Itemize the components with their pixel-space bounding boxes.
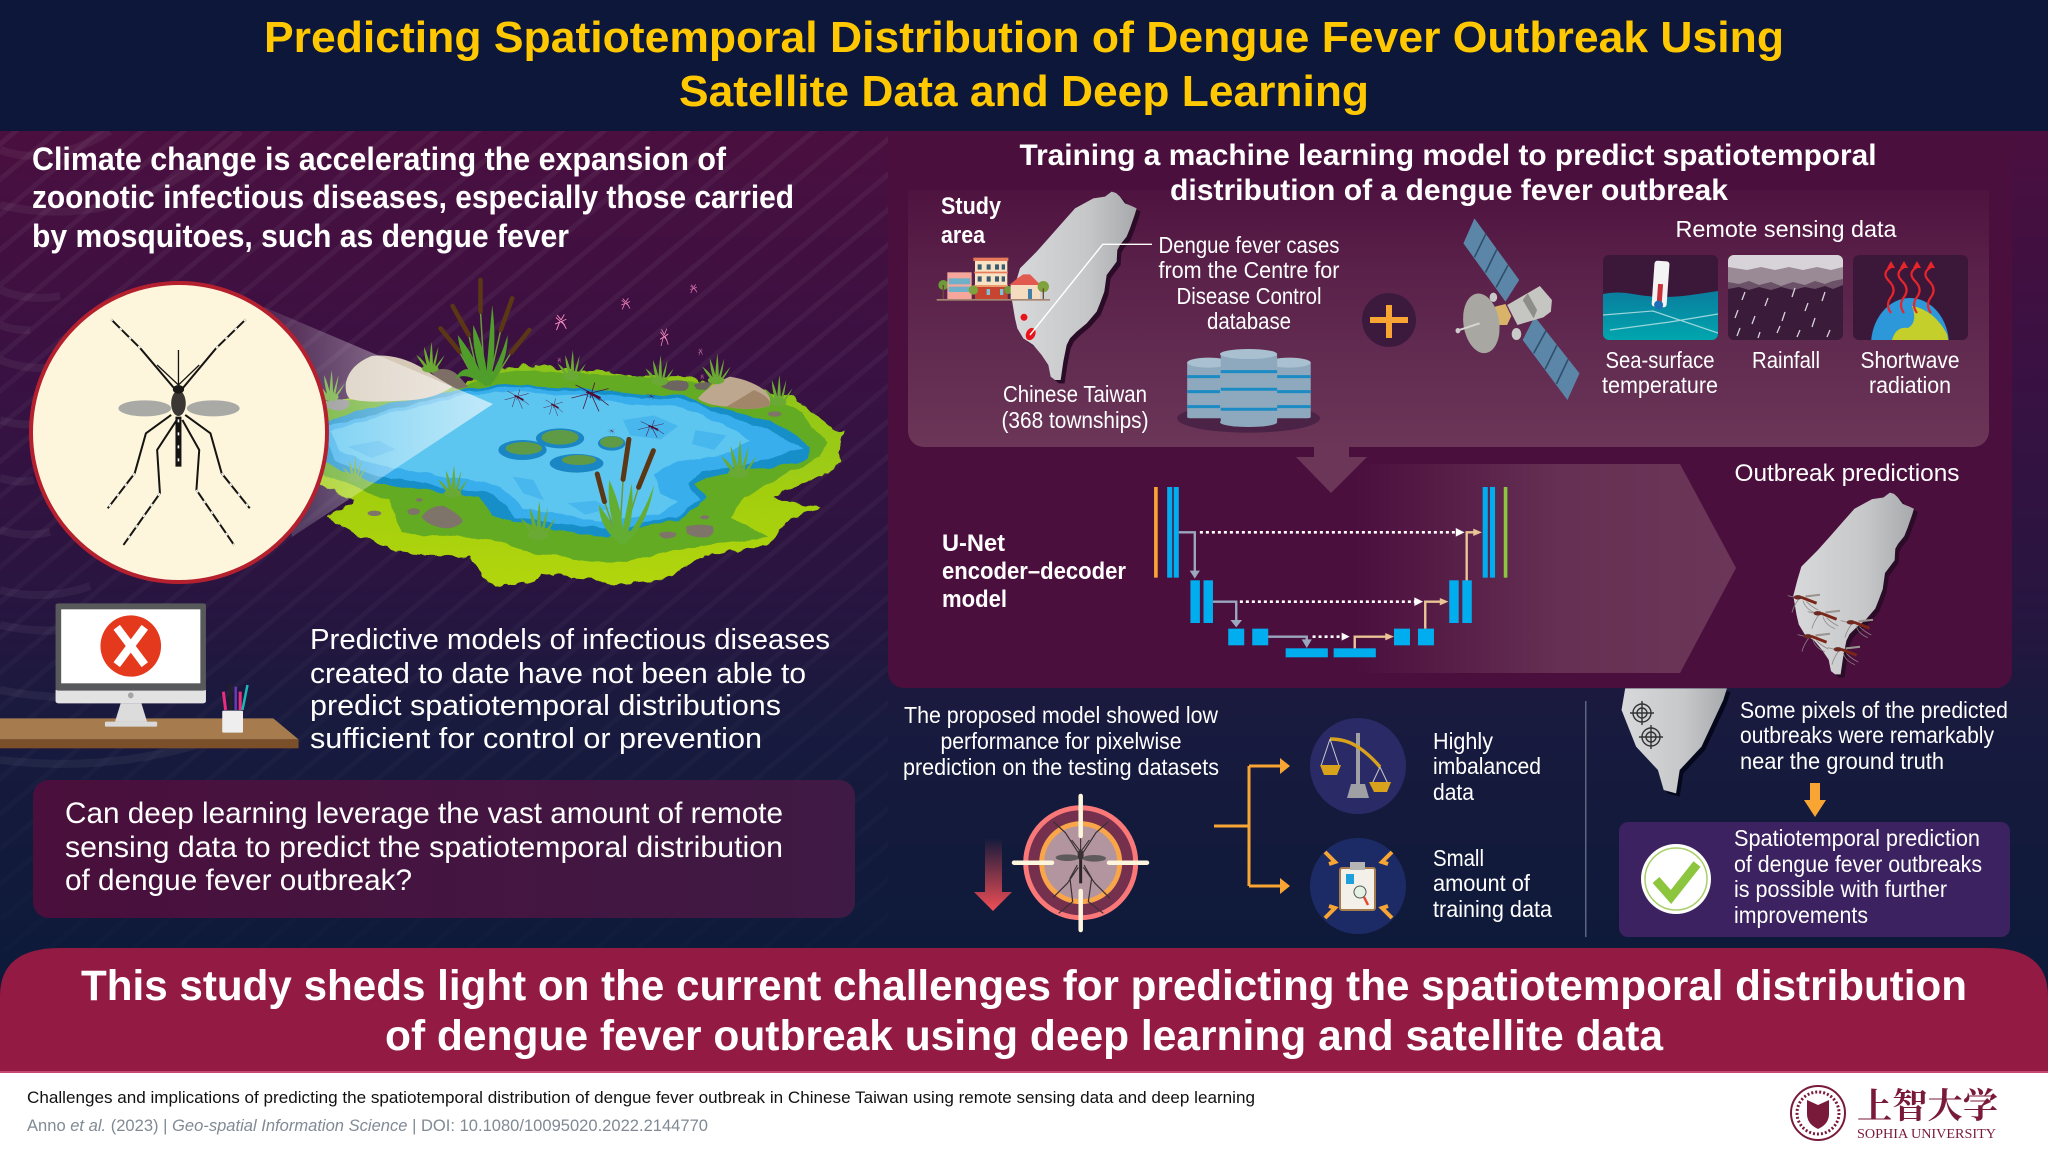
text: dengue fever cases: from the Centre for (1158, 257, 1340, 283)
panel: research question: of dengue fever outbreak? (65, 864, 412, 897)
panel: conclusion: of dengue fever outbreaks (1734, 851, 1982, 877)
icon: target markers (1630, 701, 1663, 749)
icon: database (1177, 349, 1320, 433)
tile: shortwave radiation (1853, 255, 1968, 340)
panel: conclusion: Spatiotemporal prediction (1734, 825, 1980, 851)
pond illustration (317, 280, 845, 587)
panel: conclusion: is possible with further (1734, 876, 1947, 902)
text: low performance (903, 702, 1219, 780)
heading: training a model: Training a machine learning model to predict spatiotemporal (1020, 139, 1876, 172)
mosquito swarm (505, 284, 704, 438)
heading: training a model (1020, 139, 1876, 207)
footer (0, 1071, 2048, 1152)
map: Taiwan study area (1012, 192, 1152, 383)
text: small training data: amount of (1433, 870, 1531, 896)
text: small training data (1433, 845, 1552, 922)
down arrow (1296, 447, 1367, 493)
grass tufts (317, 342, 793, 540)
tile labels: Sea-surface (1606, 347, 1714, 373)
text: small training data: Small (1433, 845, 1484, 871)
banner: conclusion statement (0, 948, 2048, 1072)
icon: buildings (937, 258, 1050, 301)
left headline: zoonotic infectious diseases, especially those carried (32, 179, 794, 215)
panel: conclusion (1619, 822, 2010, 937)
citation: Challenges and implications of predicting the spatiotemporal distribution of dengue fever outbreak in Chinese Taiwan using remote sensing data and deep learning (27, 1088, 1255, 1107)
icon: target mosquito (1014, 796, 1147, 930)
label: U-Net model: model (942, 586, 1007, 613)
text: highly imbalanced data (1433, 728, 1541, 805)
text: predictive models: created to date have not been able to (310, 658, 806, 690)
icon: clipboard data (1310, 838, 1406, 934)
text: some pixels: near the ground truth (1740, 748, 1944, 774)
icon: orange down arrow (1804, 783, 1826, 817)
plants: cattails (441, 280, 654, 544)
label: U-Net model: U-Net (942, 530, 1005, 557)
big arrow: model to predictions (1355, 464, 1736, 673)
left headline (32, 141, 794, 254)
icon: check mark (1641, 844, 1711, 914)
study area label: Study (941, 193, 1002, 220)
connector arrows (1214, 758, 1290, 894)
tile: sea-surface temperature (1603, 255, 1718, 340)
text: some pixels: Some pixels of the predicted (1740, 697, 2008, 723)
icon: balance scale (1310, 718, 1406, 814)
text: small training data: training data (1433, 896, 1552, 922)
logo: Sophia University (1791, 1086, 1998, 1142)
text: Chinese Taiwan: Chinese Taiwan (1003, 381, 1147, 407)
text: low performance: prediction on the testing datasets (903, 754, 1219, 780)
icon: mosquito (108, 319, 250, 545)
label: outbreak predictions: Outbreak predictions (1734, 460, 1960, 487)
title band: Satellite Data and Deep Learning (679, 67, 1369, 116)
label: U-Net model: encoder–decoder (942, 558, 1126, 585)
title band (0, 0, 2048, 131)
text: low performance: performance for pixelwise (940, 728, 1182, 754)
logo: Sophia University: 上智大学 (1857, 1087, 1998, 1126)
icon: computer with error (0, 603, 299, 748)
title band: Predicting Spatiotemporal Distribution of Dengue Fever Outbreak Using (264, 13, 1784, 62)
rocks (327, 356, 781, 539)
text: dengue fever cases (1158, 232, 1340, 334)
citation: Anno et al. (2023) | Geo-spatial Information Science | DOI: 10.1080/10095020.2022.2144770 (27, 1116, 708, 1135)
map: outbreak predictions (1793, 493, 1918, 678)
text: dengue fever cases: Dengue fever cases (1158, 232, 1340, 258)
icon: predicted mosquitoes (1788, 595, 1873, 665)
panel: conclusion: improvements (1734, 902, 1868, 928)
lily pads (498, 428, 625, 473)
text: Chinese Taiwan: (368 townships) (1002, 407, 1148, 433)
map: southern Taiwan detail (1622, 688, 1731, 797)
left headline: by mosquitoes, such as dengue fever (32, 218, 569, 254)
text: some pixels (1740, 697, 2008, 774)
text: highly imbalanced data: imbalanced (1433, 753, 1541, 779)
left headline: Climate change is accelerating the expansion of (32, 141, 726, 177)
text: predictive models: predict spatiotemporal distributions (310, 690, 781, 722)
text: dengue fever cases: Disease Control (1176, 283, 1322, 309)
label: remote sensing data: Remote sensing data (1676, 216, 1897, 242)
label: U-Net model (942, 530, 1126, 613)
text: predictive models: Predictive models of infectious diseases (310, 624, 830, 656)
text: low performance: The proposed model showed low (904, 702, 1218, 728)
icon: satellite (1455, 218, 1579, 400)
text: predictive models (310, 624, 830, 755)
tile labels: Shortwave (1860, 347, 1960, 373)
inner panel: input data (908, 190, 1989, 447)
study area label (941, 193, 1002, 249)
panel: research question: Can deep learning leverage the vast amount of remote (65, 797, 783, 830)
text: Chinese Taiwan (1002, 381, 1148, 433)
banner: conclusion statement: of dengue fever outbreak using deep learning and satellite data (385, 1012, 1664, 1060)
panel: research question: sensing data to predict the spatiotemporal distribution (65, 831, 783, 864)
text: highly imbalanced data: Highly (1433, 728, 1493, 754)
icon: plus (1362, 293, 1416, 347)
pond water (320, 385, 811, 538)
text: predictive models: sufficient for control or prevention (310, 723, 762, 755)
logo: Sophia University: SOPHIA UNIVERSITY (1857, 1127, 1996, 1142)
magnifier beam (264, 307, 493, 537)
text: some pixels: outbreaks were remarkably (1740, 722, 1994, 748)
text: highly imbalanced data: data (1433, 779, 1474, 805)
tile: rainfall (1728, 255, 1843, 340)
study area label: area (941, 222, 986, 249)
citation (27, 1088, 1255, 1135)
heading: training a model: distribution of a dengue fever outbreak (1170, 174, 1728, 207)
tile labels: Rainfall (1752, 347, 1820, 373)
tile labels: temperature (1602, 372, 1718, 398)
tile labels: radiation (1869, 372, 1951, 398)
pencil cup (222, 683, 247, 733)
tile labels (1602, 347, 1960, 398)
panel: research question (33, 780, 855, 918)
text: dengue fever cases: database (1207, 308, 1291, 334)
diagram: U-Net (1154, 487, 1507, 657)
banner: conclusion statement: This study sheds light on the current challenges for predicting the spatiotemporal distribution (81, 962, 1967, 1010)
grass bank (320, 365, 845, 587)
magnified mosquito circle (31, 283, 327, 582)
panel: machine learning workflow (888, 131, 2012, 688)
icon: red down arrow (974, 838, 1012, 911)
